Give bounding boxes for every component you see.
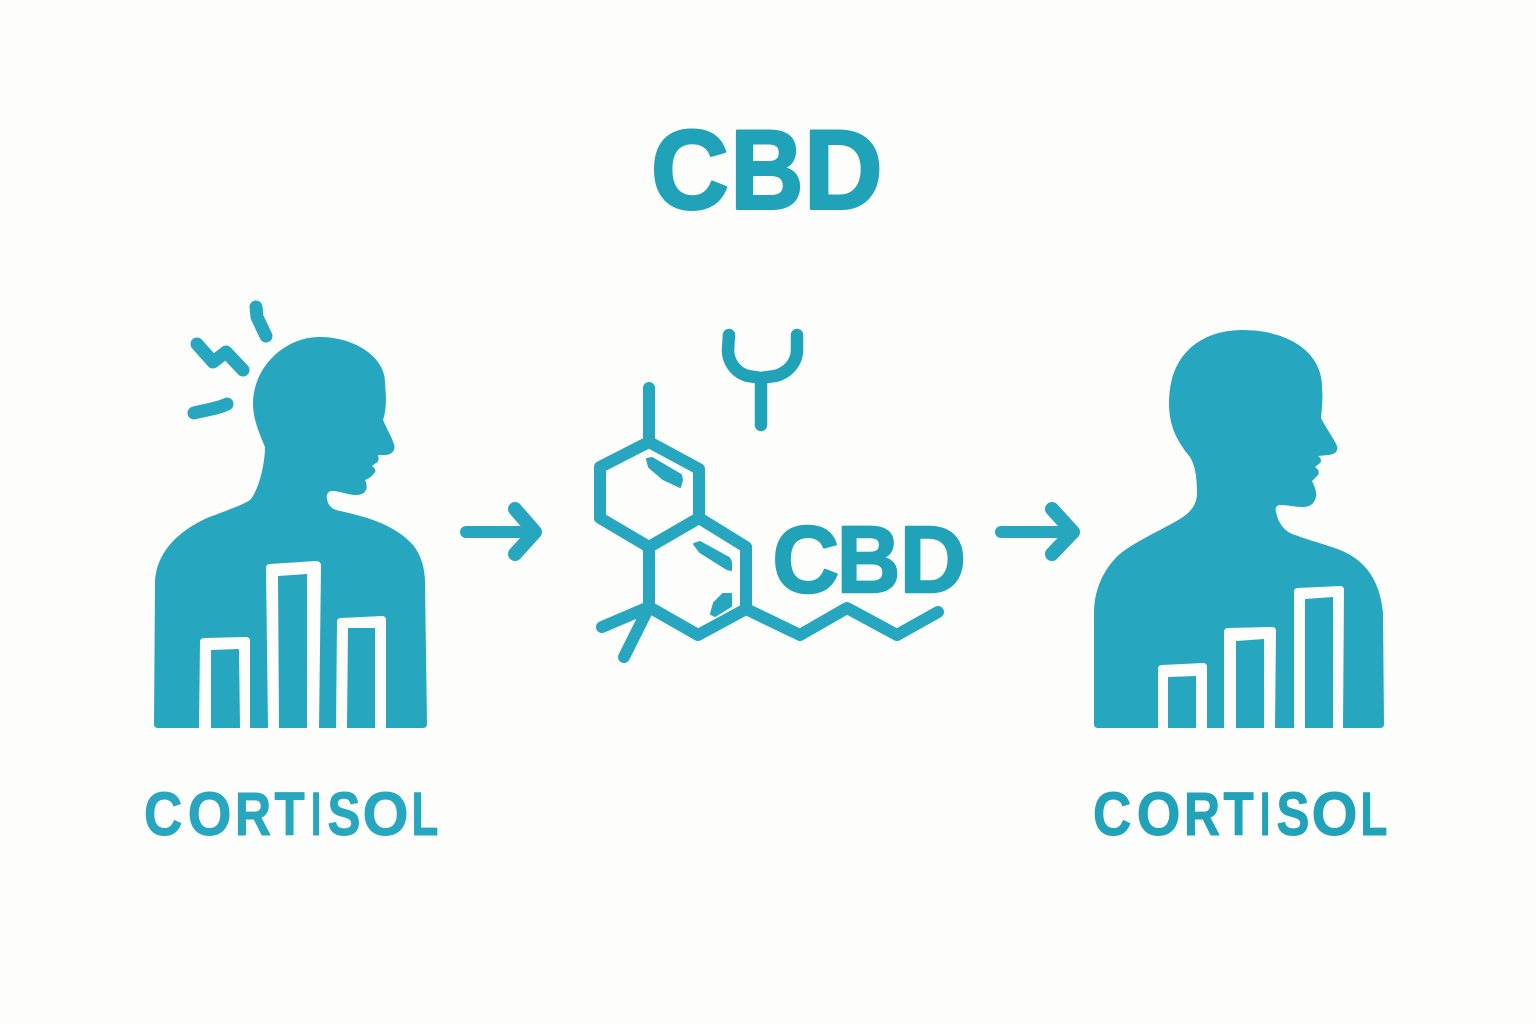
label: left cortisol: L — [412, 781, 438, 849]
label: right cortisol: O — [1312, 780, 1357, 848]
label: molecule CBD: C — [772, 506, 839, 612]
title: CBD: B — [730, 108, 803, 233]
bar chart: lowered cortisol bars — [1158, 586, 1344, 729]
title: CBD: D — [804, 108, 882, 233]
molecule bonds — [600, 388, 938, 657]
title: CBD: C — [651, 109, 729, 233]
bar chart: high cortisol bars — [199, 561, 386, 729]
icon: stress marks — [194, 307, 266, 413]
label: left cortisol: T — [274, 780, 305, 848]
label: right cortisol: S — [1276, 780, 1309, 848]
label: right cortisol — [1093, 779, 1387, 849]
left figure: stressed person with high cortisol — [154, 307, 427, 729]
arrow: left to center — [466, 509, 535, 554]
title: CBD — [651, 108, 882, 233]
label: molecule CBD: B — [837, 507, 900, 613]
label: left cortisol: R — [235, 780, 271, 848]
label: left cortisol: C — [144, 781, 182, 849]
molecule: CBD structure — [600, 388, 938, 657]
label: left cortisol: O — [363, 780, 408, 848]
silhouette: right person — [1094, 330, 1384, 728]
label: right cortisol: L — [1360, 781, 1387, 849]
label: right cortisol: I — [1260, 779, 1270, 848]
label: left cortisol: S — [328, 780, 360, 848]
label: molecule CBD — [772, 506, 966, 613]
label: right cortisol: T — [1224, 780, 1254, 848]
right figure: calm person with rising bars — [1094, 330, 1384, 729]
label: right cortisol: O — [1137, 781, 1180, 849]
label: right cortisol: C — [1093, 781, 1131, 849]
molecule double bonds — [647, 458, 731, 616]
silhouette: left person — [154, 337, 427, 728]
label: left cortisol: I — [311, 779, 321, 848]
label: molecule CBD: D — [900, 506, 966, 612]
label: right cortisol: R — [1184, 780, 1220, 848]
arrow: center to right — [1001, 509, 1073, 554]
label: left cortisol: O — [188, 781, 231, 849]
icon: receptor — [728, 335, 797, 425]
label: left cortisol — [144, 779, 438, 849]
